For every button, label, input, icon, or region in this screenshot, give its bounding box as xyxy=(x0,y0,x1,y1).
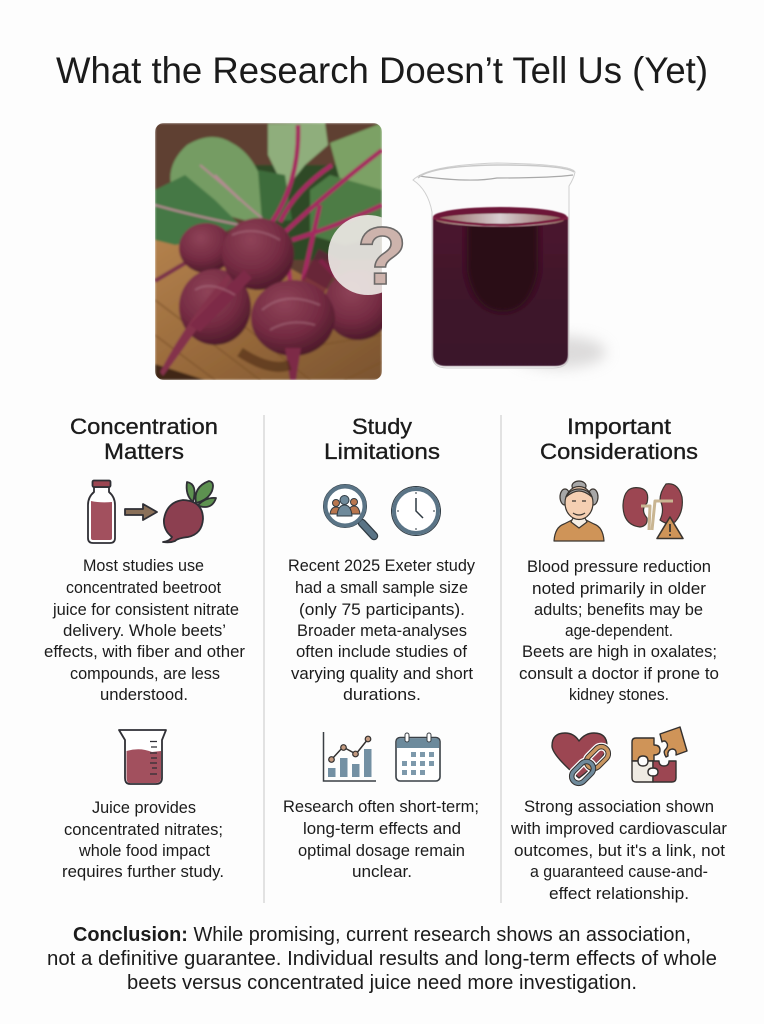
heading: Important xyxy=(567,414,672,439)
body text xyxy=(510,798,728,903)
body text: whole food impact xyxy=(78,842,210,860)
body text: optimal dosage remain xyxy=(298,842,465,860)
heading: Study xyxy=(352,414,413,439)
heading: Limitations xyxy=(324,439,440,464)
icon: measuring beaker xyxy=(119,730,166,784)
body text: consult a doctor if prone to xyxy=(519,665,719,683)
body text: Juice provides xyxy=(92,799,196,817)
icon: older adult xyxy=(554,481,604,541)
heading xyxy=(324,414,440,464)
body text: unclear. xyxy=(352,863,412,881)
conclusion: Conclusion: While promising, current research shows an association, xyxy=(73,924,691,946)
body text xyxy=(288,557,476,704)
body text xyxy=(44,557,246,704)
body text: durations. xyxy=(343,686,421,704)
panel: concentration matters xyxy=(44,414,246,881)
body text: age-dependent. xyxy=(565,622,673,640)
icon: bottle to beet xyxy=(88,480,216,543)
body text: concentrated nitrates; xyxy=(64,821,223,839)
icon: heart with chain link xyxy=(552,733,611,786)
body text xyxy=(519,558,719,704)
heading: Matters xyxy=(104,439,184,464)
icon: puzzle pieces xyxy=(632,727,687,782)
icon: magnifier with people xyxy=(324,484,374,536)
body text: Research often short-term; xyxy=(283,798,479,816)
body text: had a small sample size xyxy=(295,579,468,597)
heading xyxy=(540,414,698,464)
body text xyxy=(62,799,224,881)
panel: study limitations xyxy=(283,414,479,881)
hero image: whole beets on a wooden board xyxy=(155,123,382,380)
icon: chart xyxy=(324,732,376,781)
body text: adults; benefits may be xyxy=(534,601,703,619)
column divider right xyxy=(500,415,502,903)
question mark: ? xyxy=(357,211,407,302)
question badge backing xyxy=(328,215,382,295)
body text: concentrated beetroot xyxy=(66,579,221,597)
heading: Concentration xyxy=(70,414,218,439)
conclusion: not a definitive guarantee. Individual results and long-term effects of whole xyxy=(47,948,717,970)
body text: Broader meta-analyses xyxy=(297,622,467,640)
panel: important considerations xyxy=(510,414,728,903)
body text: often include studies of xyxy=(296,643,467,661)
icon: clock xyxy=(392,486,440,536)
body text: requires further study. xyxy=(62,863,224,881)
heading xyxy=(70,414,218,464)
body text: noted primarily in older xyxy=(532,580,707,598)
body text: juice for consistent nitrate xyxy=(52,601,239,619)
icon: kidneys with warning xyxy=(623,484,683,538)
body text: understood. xyxy=(100,686,188,704)
body text: a guaranteed cause-and- xyxy=(530,863,708,881)
body text: Strong association shown xyxy=(524,798,714,816)
body text: outcomes, but it's a link, not xyxy=(514,842,725,860)
body text: effects, with fiber and other xyxy=(44,643,246,661)
body text: Beets are high in oxalates; xyxy=(522,643,717,661)
body text: (only 75 participants). xyxy=(299,601,465,619)
body text: Recent 2025 Exeter study xyxy=(288,557,476,575)
body text xyxy=(283,798,479,881)
body text: delivery. Whole beets’ xyxy=(63,622,226,640)
conclusion: beets versus concentrated juice need more investigation. xyxy=(127,972,637,994)
body text: with improved cardiovascular xyxy=(510,820,728,838)
conclusion xyxy=(47,924,717,994)
body text: long-term effects and xyxy=(303,820,461,838)
body text: kidney stones. xyxy=(569,686,669,704)
body text: Blood pressure reduction xyxy=(527,558,711,576)
heading: Considerations xyxy=(540,439,698,464)
body text: varying quality and short xyxy=(291,665,473,683)
title: What the Research Doesn’t Tell Us (Yet) xyxy=(56,49,708,91)
icon: calendar xyxy=(396,733,440,781)
hero image: beaker of beet juice xyxy=(413,163,606,370)
column divider left xyxy=(264,415,265,903)
body text: effect relationship. xyxy=(549,885,689,903)
body text: compounds, are less xyxy=(70,665,220,683)
body text: Most studies use xyxy=(83,557,204,575)
